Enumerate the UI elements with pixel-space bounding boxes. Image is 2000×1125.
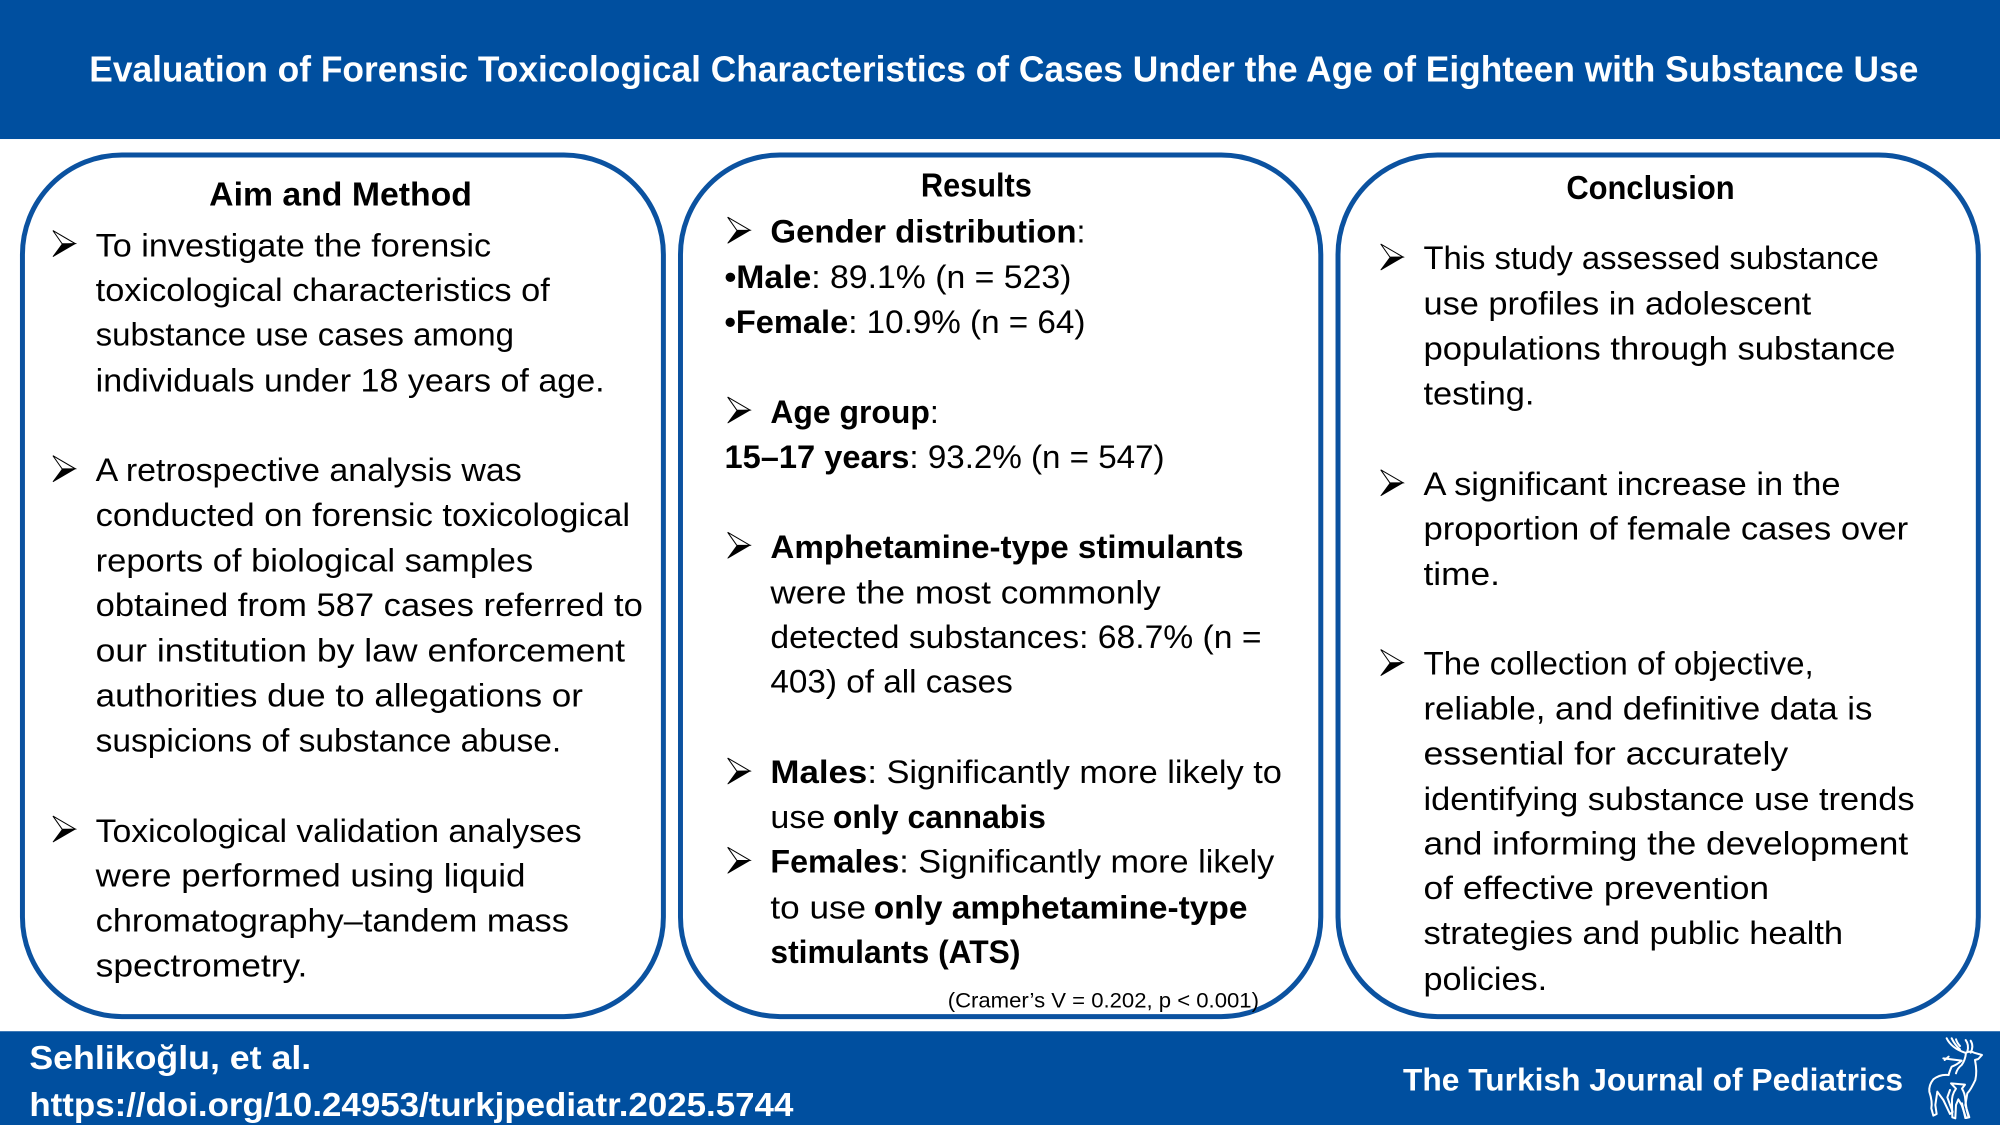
bullet: amphetamine-type stimulants: 403) of all cases (770, 664, 1013, 700)
bullet: study assessed (1381, 240, 1895, 411)
bullet: age group: : (930, 394, 939, 430)
footer citation: Sehlikoğlu, et al. (29, 1040, 311, 1077)
bullet: objective: individuals under 18 years of age. (96, 363, 605, 399)
bullet: retrospective analysis: our institution by law enforcement (96, 632, 625, 668)
bullet: objective: substance use cases among (96, 317, 514, 353)
heading: aim and method: Aim and Method (209, 176, 472, 213)
bullet: retrospective analysis: obtained from 587 cases referred to (96, 587, 643, 623)
bullet: objective (53, 227, 605, 399)
bullet: retrospective analysis: reports of biological samples (96, 542, 533, 578)
bullet: age group: : 93.2% (n = 547) (909, 439, 1165, 475)
bullet: amphetamine-type stimulants: detected substances: 68.7% (n = (770, 619, 1261, 655)
bullet: retrospective analysis: A retrospective analysis was (96, 452, 522, 488)
bullet: females: Females (770, 843, 899, 879)
bullet: males: : Significantly more likely to (867, 754, 1282, 790)
bullet: retrospective analysis (53, 452, 643, 758)
bullet: objective data: strategies and public health (1423, 915, 1843, 951)
bullet: objective data: policies. (1423, 961, 1547, 997)
bullet: study assessed: testing. (1423, 375, 1534, 411)
bullet: objective data: and informing the development (1423, 826, 1908, 862)
bullet: female increase: proportion of female cases over (1423, 511, 1908, 547)
bullet: age group (724, 394, 1165, 475)
panel: aim and method (22, 155, 663, 1017)
bullet: age group: Age group (770, 394, 930, 430)
bullet: age group: 15–17 years (724, 439, 909, 475)
bullet: females: only amphetamine-type (874, 889, 1247, 925)
footer citation (29, 1040, 794, 1124)
header band (0, 0, 2000, 139)
panel: conclusion (1338, 155, 1978, 1017)
bullet: toxicological validation (53, 813, 582, 983)
statistic note: (Cramer’s V = 0.202, p < 0.001) (948, 990, 1259, 1013)
bullet: males (728, 754, 1282, 835)
bullet: objective data (1381, 646, 1915, 997)
bullet: gender distribution: : 89.1% (n = 523) (811, 259, 1071, 295)
panel: results (680, 155, 1321, 1017)
bullet: female increase: A significant increase in the (1423, 466, 1841, 502)
bullet: gender distribution: •Female (724, 304, 848, 340)
bullet: toxicological validation: spectrometry. (96, 947, 307, 983)
journal name: The Turkish Journal of Pediatrics (1403, 1062, 1903, 1098)
bullet: retrospective analysis: suspicions of substance abuse. (96, 722, 561, 758)
bullet: toxicological validation: chromatography–tandem mass (96, 903, 569, 939)
icon: deer logo (1929, 1038, 1982, 1118)
bullet: males: use (770, 799, 825, 835)
footer band (0, 1031, 2000, 1125)
bullet: gender distribution: •Male (724, 259, 811, 295)
bullet: female increase (1381, 466, 1908, 592)
bullet: females: stimulants (ATS) (770, 934, 1020, 970)
bullet: amphetamine-type stimulants (728, 529, 1261, 700)
bullet: retrospective analysis: conducted on forensic toxicological (96, 497, 630, 533)
bullet: female increase: time. (1423, 556, 1500, 592)
heading: conclusion: Conclusion (1566, 170, 1735, 207)
bullet: amphetamine-type stimulants: Amphetamine-type stimulants (770, 529, 1244, 565)
bullet: gender distribution: Gender distribution (770, 213, 1077, 249)
bullet: study assessed: use profiles in adolescent (1423, 285, 1811, 321)
bullet: toxicological validation: were performed using liquid (95, 857, 526, 893)
bullet: toxicological validation: Toxicological validation analyses (96, 813, 582, 849)
bullet: gender distribution: : 10.9% (n = 64) (848, 304, 1085, 340)
title: Evaluation of Forensic Toxicological Characteristics of Cases Under the Age of Eighteen with Substance Use (89, 50, 1918, 90)
bullet: retrospective analysis: authorities due to allegations or (96, 678, 583, 714)
bullet: objective data: identifying substance use trends (1423, 781, 1915, 817)
bullet: objective data: reliable, and definitive data is (1423, 690, 1872, 726)
bullet: study assessed: This study assessed substance (1423, 240, 1879, 276)
heading: results: Results (921, 167, 1032, 204)
bullet: females: : Significantly more likely (899, 843, 1274, 879)
bullet: amphetamine-type stimulants: were the most commonly (769, 574, 1161, 610)
bullet: study assessed: populations through substance (1423, 331, 1895, 367)
bullet: objective: To investigate the forensic (96, 227, 491, 263)
bullet: objective data: essential for accurately (1423, 736, 1788, 772)
bullet: females (728, 843, 1274, 970)
bullet: males: Males (770, 754, 867, 790)
bullet: objective: toxicological characteristics of (96, 272, 550, 308)
bullet: objective data: The collection of objective, (1423, 646, 1814, 682)
bullet: gender distribution: : (1077, 213, 1085, 249)
bullet: gender distribution (724, 213, 1085, 340)
footer citation: https://doi.org/10.24953/turkjpediatr.2025.5744 (29, 1087, 794, 1124)
bullet: males: only cannabis (833, 799, 1046, 835)
bullet: females: to use (770, 889, 866, 925)
bullet: objective data: of effective prevention (1423, 870, 1769, 906)
